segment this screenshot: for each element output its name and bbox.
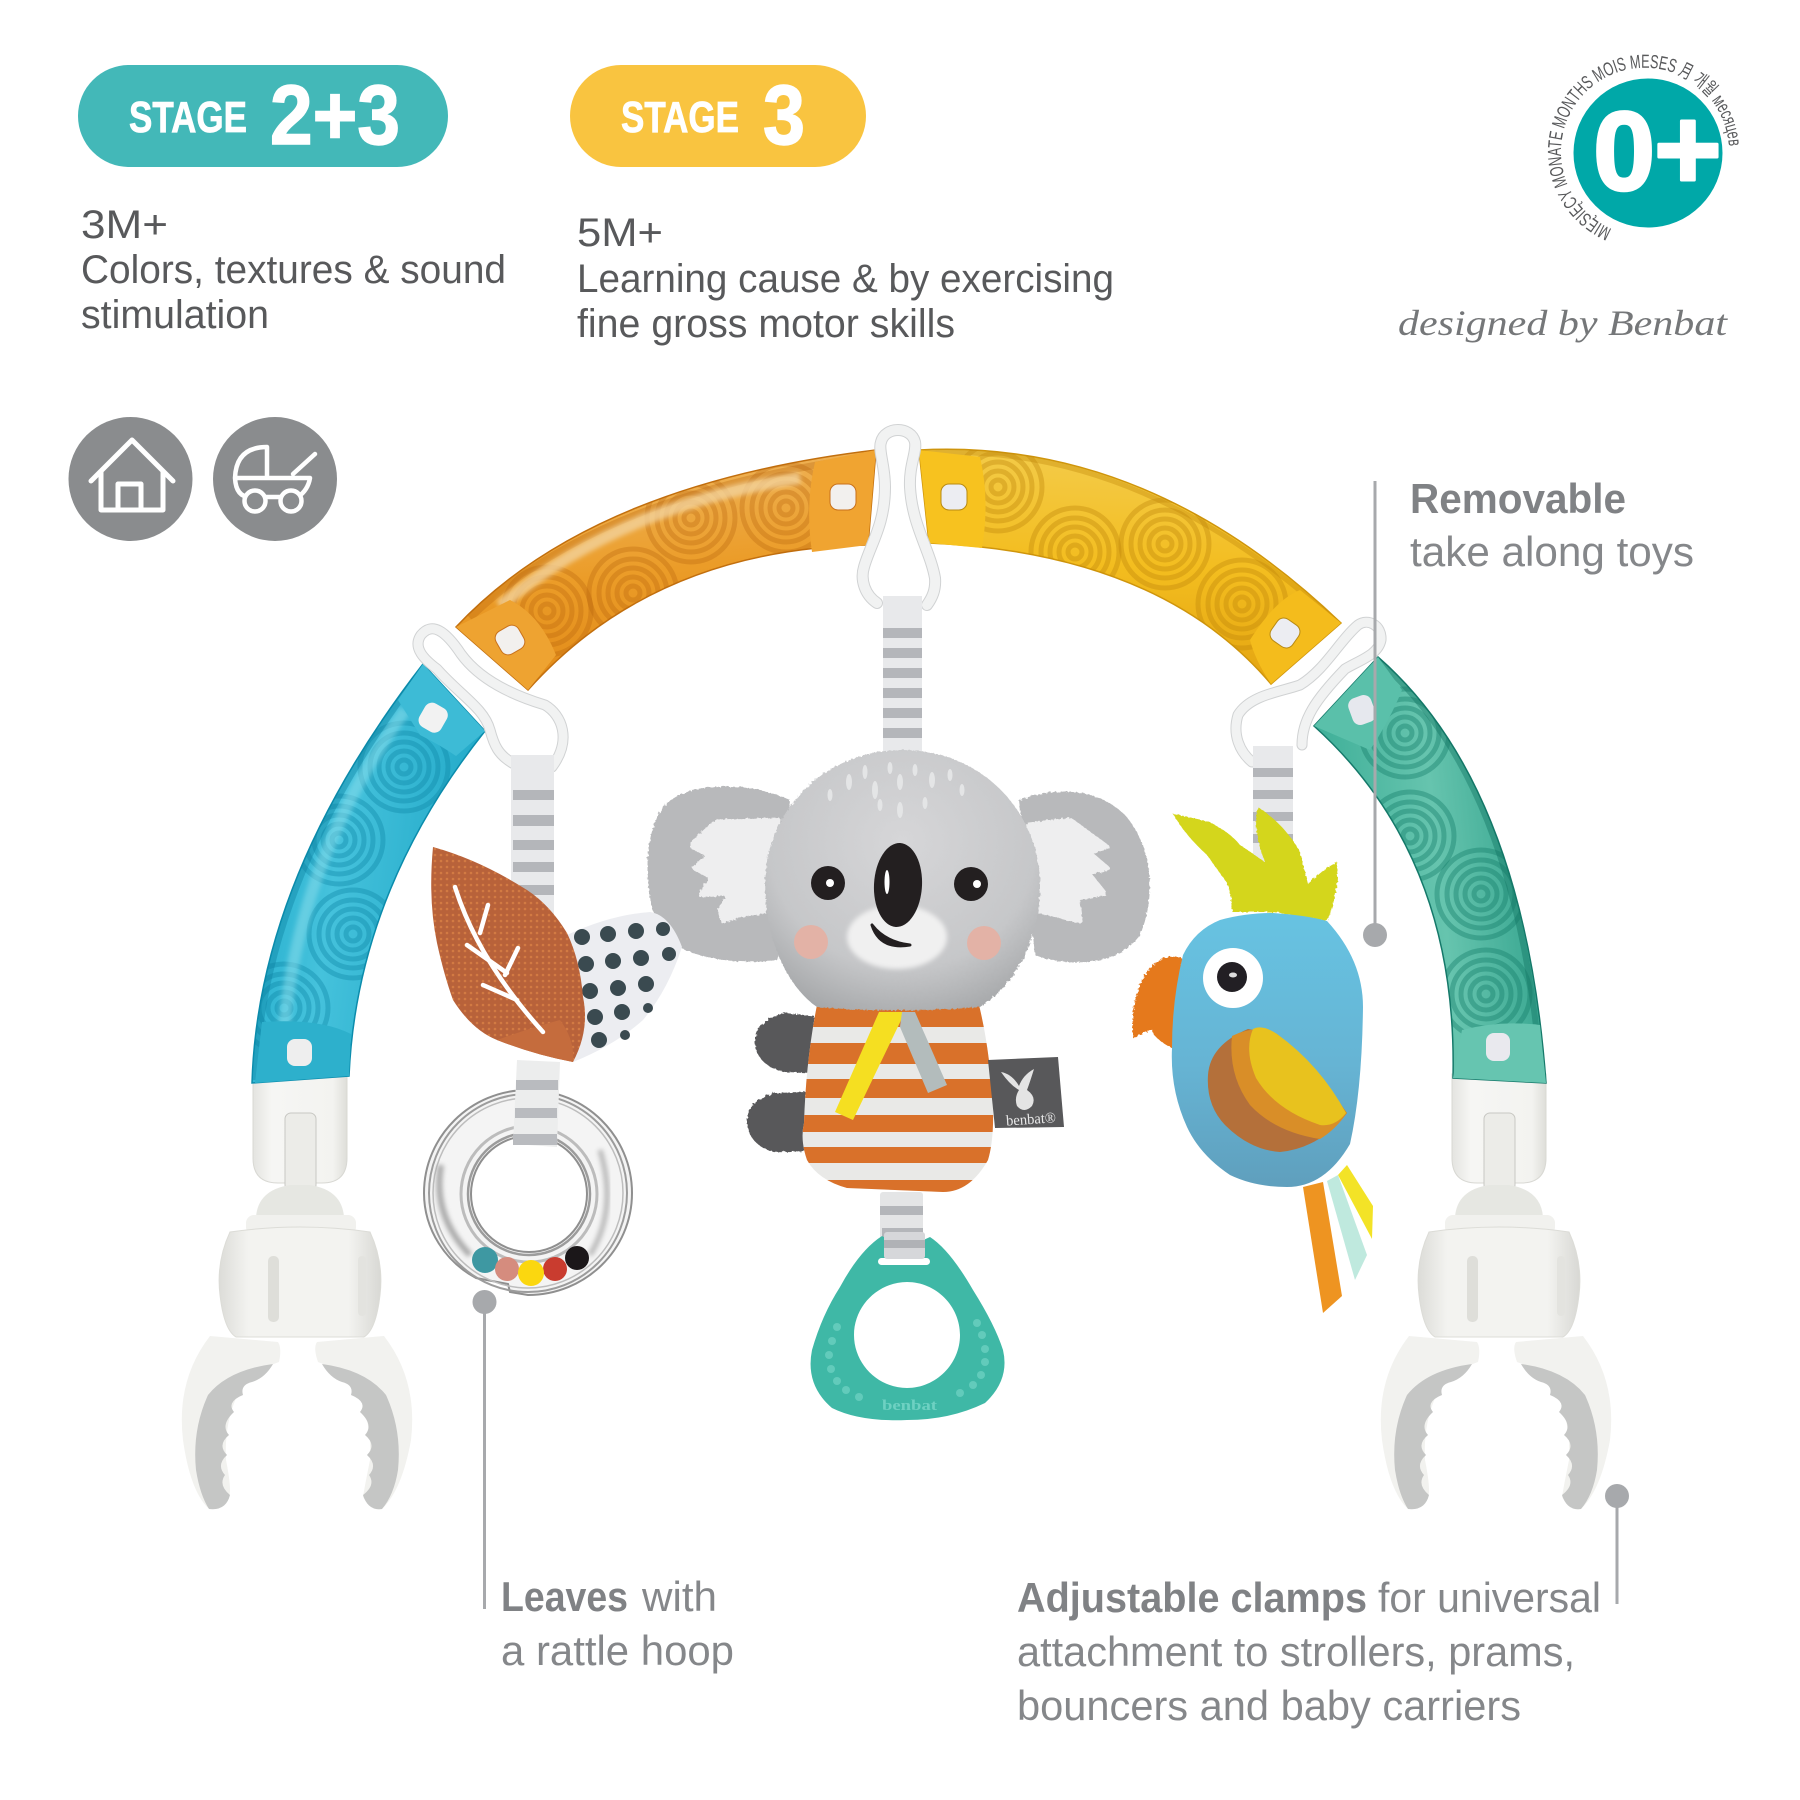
center strap xyxy=(883,596,922,756)
designed by Benbat signature: designed by Benbat xyxy=(1398,303,1728,343)
callout: leaves with rattle hoop: a rattle hoop xyxy=(501,1627,734,1674)
koala head xyxy=(765,750,1040,1010)
koala face xyxy=(794,842,1001,969)
stage 3 description: 5M+ xyxy=(577,211,663,255)
right clamp xyxy=(1381,1074,1611,1510)
teether ring: benbat xyxy=(882,1398,937,1414)
benbat tag xyxy=(988,1057,1064,1130)
stage 3 pill xyxy=(570,65,866,167)
rattle hoop xyxy=(424,1090,632,1295)
parrot tail ribbons xyxy=(1303,1165,1373,1313)
age badge 0+: + xyxy=(1654,84,1722,214)
left clamp xyxy=(182,1074,412,1510)
teether strap xyxy=(880,1192,923,1262)
stage 2+3 description xyxy=(81,203,506,337)
callout: adjustable clamps: attachment to strollers, prams, xyxy=(1017,1628,1575,1675)
callout: removable: Removable xyxy=(1410,475,1626,522)
clamp claws xyxy=(182,1336,412,1510)
polka dot leaf xyxy=(567,912,682,1062)
parrot toy xyxy=(1132,807,1373,1313)
orange arch segment xyxy=(456,450,876,690)
rattle strap xyxy=(513,1060,560,1147)
stage 2+3 pill xyxy=(78,65,448,167)
koala head flecks xyxy=(828,762,964,818)
stage 2+3 description: 3M+ xyxy=(81,203,168,247)
right hanging clip xyxy=(1236,622,1381,762)
koala toy xyxy=(648,750,1150,1194)
clamp housing xyxy=(219,1227,381,1337)
stage 2+3 description: stimulation xyxy=(81,293,269,337)
parrot body xyxy=(1172,913,1363,1187)
icon: stroller xyxy=(213,417,337,541)
callout: leaves with rattle hoop xyxy=(472,1290,734,1674)
parrot beak xyxy=(1132,957,1182,1049)
stage 3 pill: STAGE xyxy=(621,93,739,142)
stage 3 description: fine gross motor skills xyxy=(577,302,955,346)
parrot wing xyxy=(1208,1027,1347,1152)
callout: leaves with rattle hoop: Leaves xyxy=(501,1573,628,1620)
callout: adjustable clamps: for universal xyxy=(1378,1574,1601,1621)
stage 3 description xyxy=(577,211,1114,346)
callout: adjustable clamps: bouncers and baby carriers xyxy=(1017,1682,1521,1729)
parrot strap xyxy=(1253,746,1293,866)
yellow arch segment xyxy=(919,443,1341,684)
stage 2+3 pill: 2+3 xyxy=(270,68,400,162)
swivel joint xyxy=(246,1113,356,1235)
center hanging clip xyxy=(863,430,935,605)
age badge 0+: MIĘSIĘCY MONATE MONTHS MOIS MESES 月 개월 месяцев xyxy=(1548,54,1739,240)
green arch segment xyxy=(1314,657,1546,1083)
left hanging clip xyxy=(418,629,563,767)
koala arms xyxy=(747,1013,814,1152)
stage 3 description: Learning cause & by exercising xyxy=(577,257,1114,301)
orange leaf xyxy=(431,847,585,1062)
callout: leaves with rattle hoop: with xyxy=(641,1573,717,1620)
koala ears xyxy=(648,786,1150,962)
icon: home xyxy=(68,417,192,541)
clamp arm base xyxy=(253,1074,347,1183)
stage 2+3 pill: STAGE xyxy=(129,93,247,142)
callout: adjustable clamps xyxy=(1017,1484,1629,1729)
koala body xyxy=(795,1005,1000,1194)
teether ring xyxy=(811,1232,1005,1420)
callout: removable: take along toys xyxy=(1410,528,1694,575)
callout: adjustable clamps: Adjustable clamps xyxy=(1017,1574,1367,1621)
leaf strap xyxy=(511,755,554,930)
callout: removable xyxy=(1363,475,1694,947)
koala ribbons xyxy=(835,1012,947,1120)
parrot crest xyxy=(1173,807,1338,921)
blue arch segment xyxy=(240,664,485,1083)
benbat tag: benbat® xyxy=(1006,1110,1056,1130)
parrot eye xyxy=(1203,948,1263,1008)
age badge 0+: 0 xyxy=(1593,89,1655,214)
stage 2+3 description: Colors, textures & sound xyxy=(81,248,506,292)
stage 3 pill: 3 xyxy=(763,68,805,162)
